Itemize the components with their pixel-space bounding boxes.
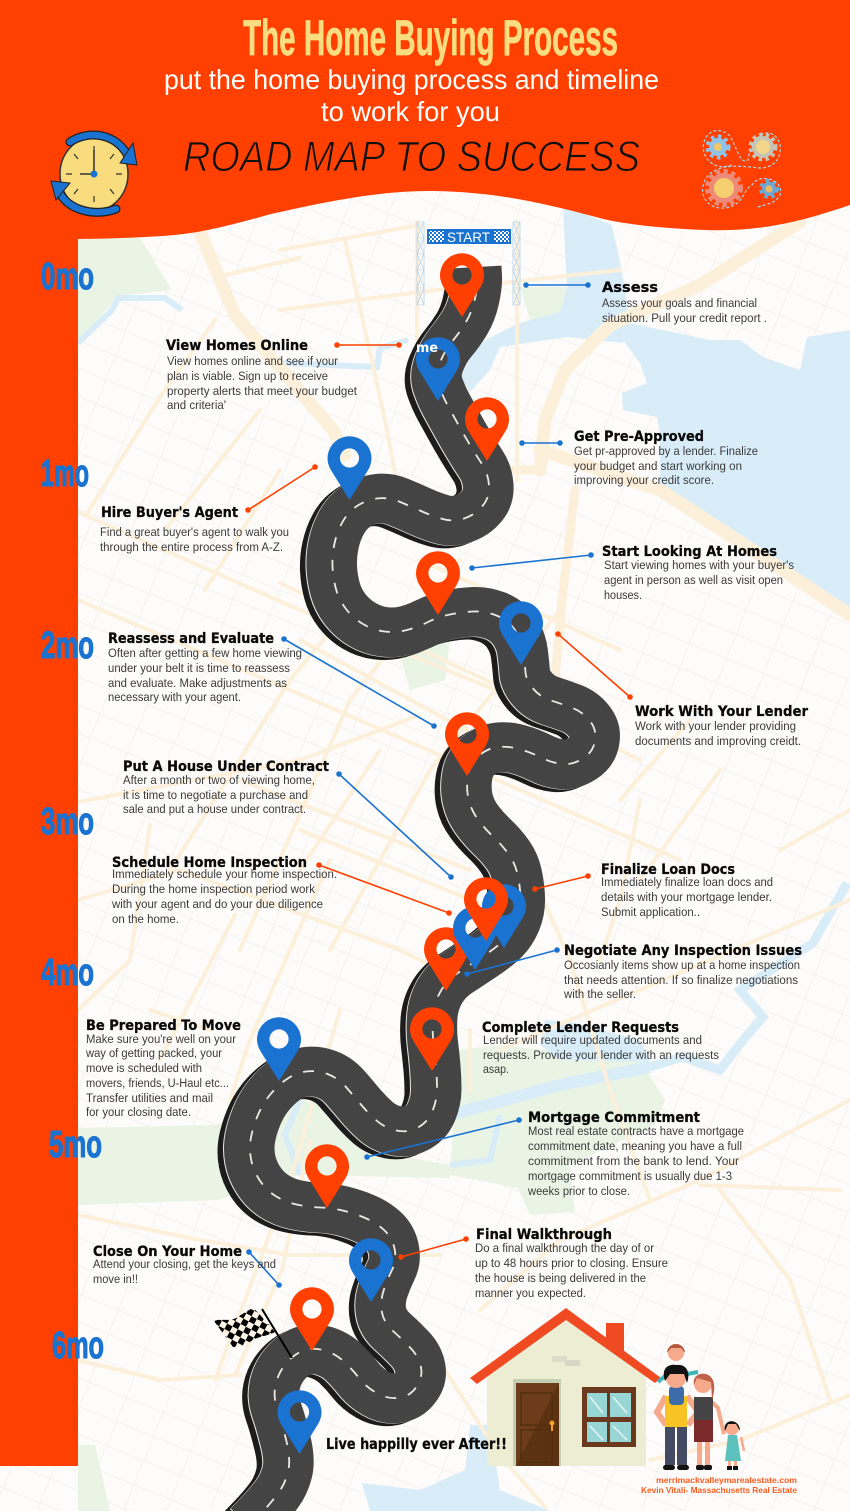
description: [475, 1241, 668, 1300]
subtitle: put the home buying process and timeline: [164, 64, 659, 95]
description: way of getting packed, your: [85, 1046, 222, 1060]
family illustration: [657, 1344, 744, 1470]
house illustration: [470, 1308, 661, 1466]
description: commitment from the bank to lend. Your: [528, 1154, 739, 1168]
description: [635, 719, 801, 748]
step: Get Pre-Approved: [520, 429, 758, 487]
door: [513, 1379, 561, 1466]
description: [602, 296, 767, 325]
footer credits: Kevin Vitali- Massachusetts Real Estate: [641, 1485, 797, 1495]
footer credits: merrimackvalleymarealestate.com: [656, 1475, 797, 1485]
description: requests. Provide your lender with an requests: [483, 1048, 719, 1062]
month labels: 2mo: [41, 625, 94, 667]
description: your budget and start working on: [574, 459, 742, 473]
main roads: [197, 222, 850, 615]
description: and evaluate. Make adjustments as: [108, 676, 287, 690]
description: [93, 1257, 276, 1286]
connector: [247, 1250, 281, 1287]
description: Often after getting a few home viewing: [108, 646, 302, 660]
step: Close On Your Home: [93, 1244, 281, 1287]
description: sale and put a house under contract.: [123, 802, 306, 816]
description: During the home inspection period work: [112, 882, 316, 896]
description: Lender will require updated documents and: [483, 1033, 702, 1047]
description: Do a final walkthrough the day of or: [475, 1241, 654, 1255]
mother: [694, 1374, 724, 1470]
heading: Negotiate Any Inspection Issues: [564, 943, 802, 959]
step: Reassess and Evaluate: [108, 631, 436, 728]
pin: blue 15: [349, 1238, 393, 1302]
month labels: 6mo: [52, 1325, 104, 1367]
heading: Work With Your Lender: [635, 704, 809, 720]
description: Transfer utilities and mail: [86, 1091, 213, 1105]
window: [582, 1387, 636, 1447]
pin: red 10: [464, 877, 508, 941]
heading: Finalize Loan Docs: [601, 862, 735, 878]
heading: Be Prepared To Move: [86, 1018, 241, 1034]
step: Hire Buyer's Agent: [100, 465, 317, 554]
heading: Get Pre-Approved: [574, 429, 704, 445]
icon: checkered finish flag: [214, 1308, 292, 1358]
heading: Hire Buyer's Agent: [101, 505, 238, 521]
step: Schedule Home Inspection: [111, 855, 451, 926]
month labels: [41, 256, 104, 1367]
description: details with your mortgage lender.: [601, 890, 772, 904]
pin: red 12: [410, 1007, 454, 1071]
description: houses.: [604, 588, 642, 602]
description: [563, 958, 800, 1001]
description: movers, friends, U-Haul etc...: [86, 1076, 229, 1090]
description: through the entire process from A-Z.: [100, 540, 283, 554]
icon: clock with arrows: [51, 135, 137, 212]
heading: Complete Lender Requests: [482, 1020, 679, 1036]
pin: blue 6: [499, 601, 543, 665]
connector: [246, 465, 317, 512]
map pins: [257, 253, 543, 1454]
connector: [465, 948, 559, 976]
icon: gears: [703, 131, 781, 208]
pin: red 11: [424, 927, 468, 991]
description: Assess your goals and financial: [602, 296, 757, 310]
description: Immediately finalize loan docs and: [601, 875, 773, 889]
step: Mortgage Commitment: [365, 1110, 744, 1198]
description: [85, 1032, 236, 1119]
stray label fragment: me: [416, 341, 438, 356]
heading: Start Looking At Homes: [602, 544, 777, 560]
month labels: 1mo: [41, 453, 89, 495]
father carrying child: [657, 1344, 698, 1470]
description: move is scheduled with: [86, 1061, 202, 1075]
step: Assess: [524, 280, 767, 325]
pin: blue 8: [482, 884, 526, 948]
step: Negotiate Any Inspection Issues: [465, 943, 802, 1001]
description: [123, 773, 315, 816]
pin: red 3: [465, 397, 509, 461]
description: Immediately schedule your home inspection.: [112, 867, 337, 881]
footer credits: [641, 1475, 797, 1495]
step: Final Walkthrough: [399, 1227, 668, 1300]
description: Find a great buyer's agent to walk you: [100, 525, 289, 539]
description: property alerts that meet your budget: [167, 384, 358, 398]
description: Work with your lender providing: [635, 719, 796, 733]
month labels: 3mo: [41, 801, 94, 843]
description: that needs attention. If so finalize negotiations: [564, 973, 798, 987]
connector: [520, 441, 562, 445]
description: [604, 558, 794, 602]
description: necessary with your agent.: [108, 690, 241, 704]
connector: [556, 632, 632, 699]
description: After a month or two of viewing home,: [123, 773, 315, 787]
connector: [337, 772, 453, 879]
start banner with scaffold: [417, 222, 520, 305]
description: mortgage commitment is usually due 1-3: [528, 1169, 732, 1183]
step: Put A House Under Contract: [123, 759, 453, 879]
description: Most real estate contracts have a mortgage: [528, 1124, 744, 1138]
connector: [399, 1237, 468, 1259]
step: Complete Lender Requests: [482, 1020, 719, 1076]
heading: Put A House Under Contract: [123, 759, 329, 775]
heading: Close On Your Home: [93, 1244, 242, 1260]
pin: blue 9: [453, 906, 497, 970]
connector: [533, 874, 590, 891]
description: [574, 444, 758, 487]
pin: blue 2: [416, 337, 460, 401]
pin: blue 13: [257, 1017, 301, 1081]
connector: [317, 863, 451, 915]
description: weeks prior to close.: [527, 1184, 630, 1198]
step: Work With Your Lender: [556, 632, 809, 748]
description: [527, 1124, 744, 1198]
description: [483, 1033, 719, 1076]
description: up to 48 hours prior to closing. Ensure: [475, 1256, 668, 1270]
description: Occosianly items show up at a home inspection: [564, 958, 800, 972]
description: asap.: [483, 1062, 509, 1076]
heading: Schedule Home Inspection: [112, 855, 307, 871]
start banner with scaffold: START: [447, 229, 490, 245]
heading: Mortgage Commitment: [528, 1110, 700, 1126]
description: with your agent and do your due diligence: [111, 897, 323, 911]
description: [108, 646, 302, 704]
description: situation. Pull your credit report .: [602, 311, 767, 325]
closing line: Live happilly ever After!!: [326, 1435, 507, 1453]
winding road: [242, 267, 595, 1511]
description: agent in person as well as visit open: [604, 573, 783, 587]
description: [601, 875, 773, 919]
description: with the seller.: [563, 987, 636, 1001]
pin: red 5: [416, 551, 460, 615]
connector: [335, 343, 401, 347]
description: Start viewing homes with your buyer's: [604, 558, 794, 572]
step: Be Prepared To Move: [85, 1018, 241, 1119]
pin: red 16: [290, 1287, 334, 1351]
description: [167, 354, 358, 412]
description: move in!!: [93, 1272, 138, 1286]
road map heading: ROAD MAP TO SUCCESS: [183, 133, 640, 181]
pin: red 14: [305, 1144, 349, 1208]
description: for your closing date.: [86, 1105, 191, 1119]
description: View homes online and see if your: [167, 354, 338, 368]
pin: red 7: [445, 712, 489, 776]
step: Finalize Loan Docs: [533, 862, 773, 919]
subtitle: [164, 64, 659, 127]
description: Make sure you're well on your: [86, 1032, 236, 1046]
connector: [524, 283, 590, 287]
daughter: [725, 1421, 744, 1470]
description: Get pr-approved by a lender. Finalize: [574, 444, 758, 458]
step: Start Looking At Homes: [470, 544, 794, 602]
pin: blue 17: [278, 1390, 322, 1454]
description: [111, 867, 337, 926]
description: and criteria': [167, 398, 226, 412]
description: it is time to negotiate a purchase and: [123, 788, 308, 802]
description: Submit application..: [601, 905, 700, 919]
pin: red 1: [440, 253, 484, 317]
description: plan is viable. Sign up to receive: [167, 369, 328, 383]
connector: [470, 553, 593, 570]
heading: Assess: [602, 280, 658, 296]
description: commitment date, meaning you have a full: [528, 1139, 742, 1153]
description: improving your credit score.: [574, 473, 714, 487]
description: Attend your closing, get the keys and: [93, 1257, 276, 1271]
connector: [282, 637, 436, 728]
description: under your belt it is time to reassess: [108, 661, 290, 675]
month labels: 4mo: [41, 952, 94, 994]
subtitle: to work for you: [321, 96, 500, 127]
description: documents and improving creidt.: [635, 734, 801, 748]
description: the house is being delivered in the: [475, 1271, 646, 1285]
pin: blue 4: [328, 436, 372, 500]
heading: Reassess and Evaluate: [108, 631, 274, 647]
heading: Final Walkthrough: [476, 1227, 612, 1243]
connector: [365, 1118, 521, 1159]
step: View Homes Online: [166, 338, 401, 412]
description: [100, 525, 289, 554]
description: manner you expected.: [475, 1286, 586, 1300]
description: on the home.: [112, 912, 179, 926]
heading: View Homes Online: [166, 338, 308, 354]
month labels: 0mo: [41, 256, 94, 298]
month labels: 5mo: [49, 1124, 102, 1166]
